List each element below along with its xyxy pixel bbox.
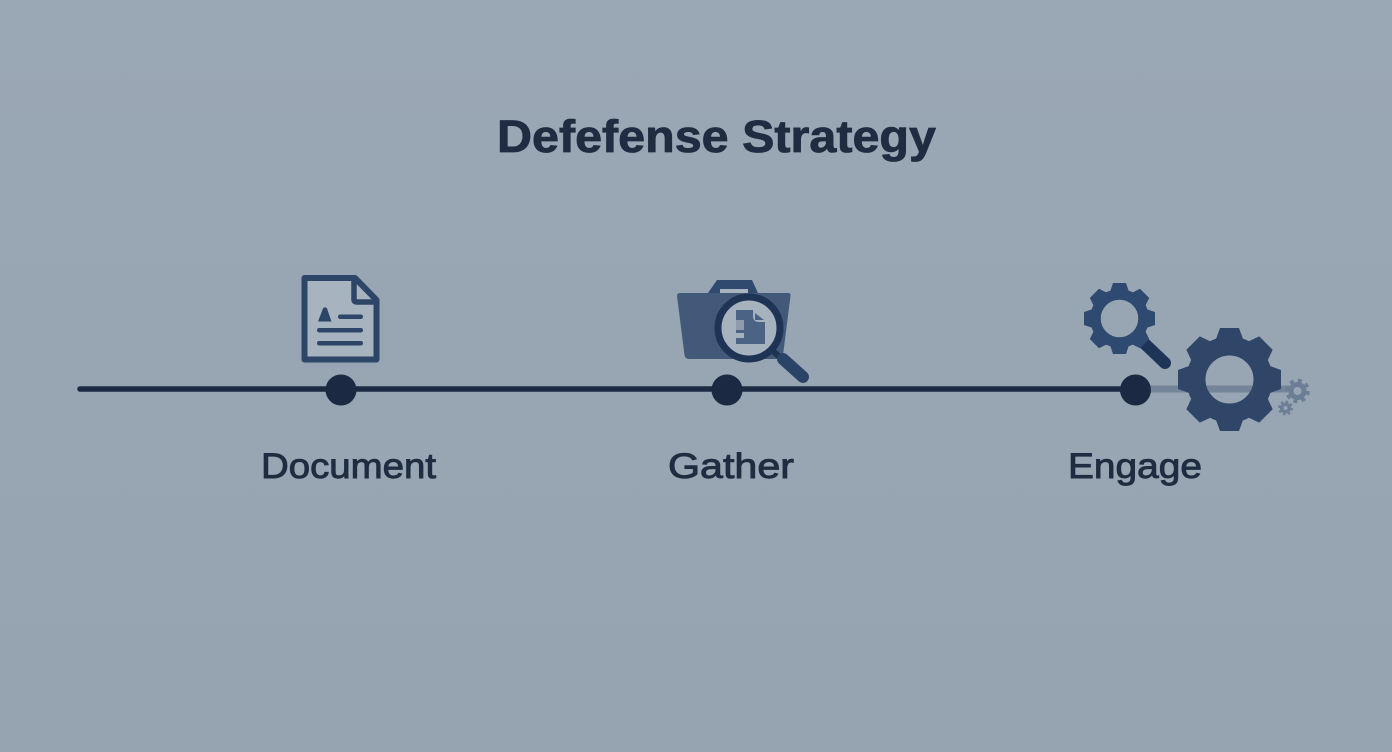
title: Defefense Strategy	[497, 111, 936, 162]
label: Document	[261, 447, 436, 486]
marker dot	[326, 374, 356, 406]
icon: large gear	[1178, 328, 1281, 431]
milestone: Engage	[1068, 283, 1308, 486]
milestone: Gather	[668, 280, 803, 486]
icon: document	[304, 278, 376, 360]
label: Engage	[1068, 447, 1202, 486]
milestone: Document	[261, 278, 436, 486]
timeline main line	[80, 386, 1140, 392]
icon: tiny gear upper	[1287, 380, 1308, 402]
timeline	[80, 386, 1295, 392]
icon: tiny gear lower	[1279, 402, 1292, 414]
icon: folder with magnifier	[677, 280, 803, 377]
marker dot	[1120, 374, 1151, 406]
marker dot	[712, 374, 742, 406]
icon: small gear with handle	[1084, 283, 1165, 363]
label: Gather	[668, 447, 794, 486]
timeline faded segment	[1140, 386, 1295, 392]
